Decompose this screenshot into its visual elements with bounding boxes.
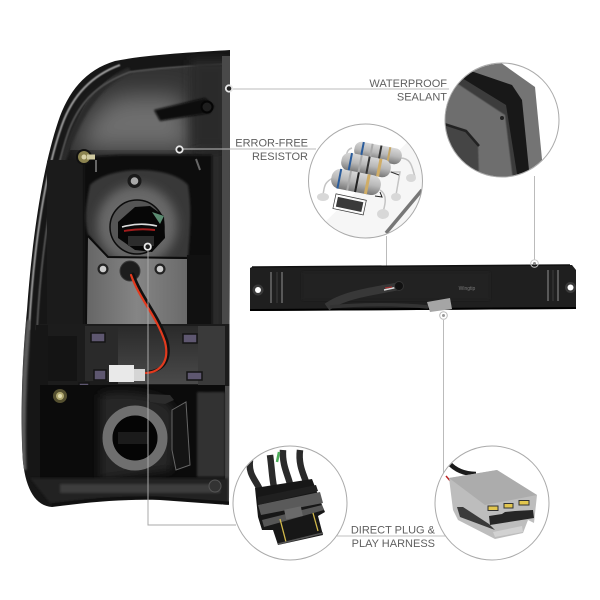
bulb socket hole [110,200,164,254]
chip [333,194,366,215]
contact slots [488,500,529,510]
upper clip [154,98,214,121]
bulb housing [84,155,212,330]
resistor B [341,152,391,178]
white connector [109,365,145,382]
lower section [40,385,225,480]
brass stud upper [76,149,95,165]
resistor C [331,168,381,195]
bar mounting holes [252,284,264,296]
label: error-free resistor: ERROR-FREE [235,138,308,150]
inset: grey plug [435,446,549,560]
inset: waterproof sealant [440,60,559,180]
lens ring [108,410,162,466]
label: waterproof sealant: SEALANT [397,92,447,104]
leader line: plug to bar [442,320,444,476]
bar top and bottom markers [440,260,538,319]
bar wire harness [327,286,400,307]
solder pads [317,174,416,219]
label: waterproof sealant: WATERPROOF [369,78,447,90]
inset: resistor board [308,124,430,240]
plastic clips [80,332,203,385]
screws and grommet [128,174,142,188]
leader line: resistor to bar [386,236,388,271]
label: waterproof sealant [369,78,447,104]
rear bar housing [250,260,576,319]
inset: black plug [233,446,347,560]
stud lower [53,389,67,403]
bottom band [30,478,228,503]
label: direct plug and play harness: PLAY HARNESS [352,538,435,550]
tail lamp rear view [22,50,230,507]
wires [448,462,476,474]
red and black wire [131,274,168,373]
leader line: harness between [337,535,446,537]
leader line: resistor [183,148,316,150]
leader line: harness left [148,251,236,525]
bar plug [427,298,452,312]
leader line: waterproof [232,88,449,90]
label: error-free resistor [235,138,308,163]
label: direct plug and play harness: DIRECT PLUG & [351,524,436,536]
infographic: tail lamp features [22,50,576,560]
cable [386,190,422,233]
marker dots [144,85,390,279]
label: error-free resistor: RESISTOR [252,151,308,163]
leader line: sealant to bar [534,176,536,260]
wires [250,450,306,490]
middle section [84,324,230,386]
resistor A [354,142,402,164]
resistor legs [322,148,415,212]
bar lettering: Wingtip [459,286,476,292]
label: direct plug and play harness [351,524,436,550]
